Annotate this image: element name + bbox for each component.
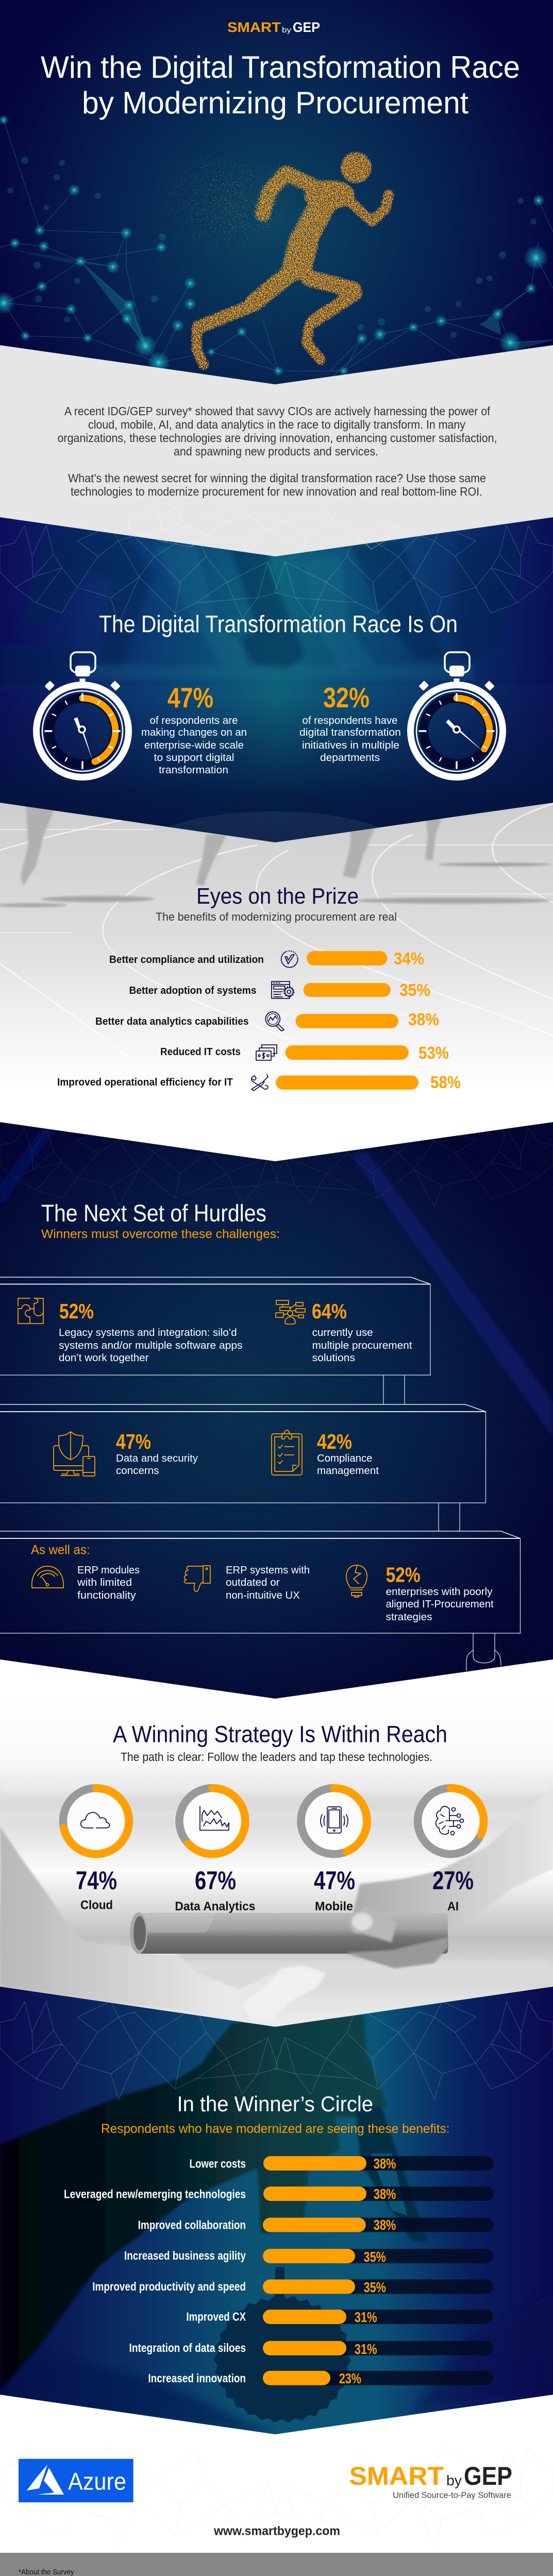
bar: CX xyxy=(186,2309,493,2325)
bar: innovation xyxy=(148,2370,493,2386)
page background: grey intro band xyxy=(0,309,553,567)
donut: mobile 47% xyxy=(301,1788,367,1913)
bar: efficiency xyxy=(57,1073,461,1092)
footer mesh xyxy=(0,2447,553,2545)
bar: IT costs: Reduced IT costs xyxy=(160,1046,241,1058)
website: www.smartbygep.com xyxy=(213,2524,340,2538)
panel: eyes on the prize xyxy=(57,884,461,1092)
Azure logo: Azure xyxy=(68,2468,126,2495)
bar: analytics: 38% xyxy=(408,1010,439,1029)
stat 47%: to support digital xyxy=(154,752,234,764)
panel: a winning strategy is within reach xyxy=(0,1699,553,2031)
donut: AI 27%: 27% xyxy=(432,1866,474,1895)
bar: compliance: 34% xyxy=(394,949,424,968)
heading: Eyes on the Prize xyxy=(196,884,359,909)
panel: hero xyxy=(0,0,553,384)
stat 32%: initiatives in multiple xyxy=(302,740,399,751)
bar: data siloes: Integration of data siloes xyxy=(129,2341,246,2354)
subheading: Winners must overcome these challenges: xyxy=(41,1227,280,1241)
logo: by xyxy=(282,26,292,35)
stat 47%: 47% xyxy=(167,682,213,714)
bar: collaboration: 38% xyxy=(374,2217,396,2233)
bar: data siloes: 31% xyxy=(355,2341,377,2357)
bar: IT costs: 53% xyxy=(418,1043,449,1062)
panel: intro text xyxy=(58,404,497,498)
particle runner xyxy=(124,116,389,365)
bar: efficiency: Improved operational efficiency for IT xyxy=(57,1077,233,1088)
bar: IT costs xyxy=(160,1043,449,1062)
donut: cloud 74%: 74% xyxy=(76,1866,117,1895)
hurdle 3: ERP modules: functionality xyxy=(77,1590,136,1601)
panel: intro text: and spawning new products and services. xyxy=(174,445,378,458)
bar: productivity: Improved productivity and speed xyxy=(92,2280,246,2293)
donut: mobile 47%: Mobile xyxy=(315,1900,353,1913)
bar: adoption: Better adoption of systems xyxy=(129,985,257,996)
hurdle 2: 47%: Data and security xyxy=(116,1453,198,1464)
heading: In the Winner’s Circle xyxy=(177,2092,373,2116)
heading: The Next Set of Hurdles xyxy=(41,1199,266,1226)
bar: efficiency: 58% xyxy=(430,1073,461,1092)
panel: footer xyxy=(0,2447,553,2576)
SMART by GEP logo xyxy=(349,2462,512,2500)
hurdle 3: ERP systems: ERP systems with xyxy=(226,1565,310,1576)
SMART by GEP logo: GEP xyxy=(464,2462,512,2490)
stat 47%: enterprise-wide scale xyxy=(144,740,244,751)
hurdle 3: ERP modules xyxy=(32,1565,140,1601)
heading: A Winning Strategy Is Within Reach xyxy=(113,1721,447,1748)
hurdle 1: 52%: 52% xyxy=(59,1299,94,1323)
panel: intro text: A recent IDG/GEP survey* showed that savvy CIOs are actively harnessing the power of xyxy=(64,404,491,418)
hurdle 3: ERP modules: ERP modules xyxy=(77,1565,140,1576)
bar: lower costs xyxy=(190,2156,494,2172)
hurdle 3: ERP systems xyxy=(185,1565,310,1601)
stat 32%: of respondents have xyxy=(302,715,398,726)
hurdle 1: 52%: don’t work together xyxy=(59,1352,149,1364)
stat 47% xyxy=(141,682,247,776)
hurdle 2: 47% xyxy=(54,1430,198,1477)
section heading: The Digital Transformation Race Is On xyxy=(99,611,458,637)
Azure logo xyxy=(19,2459,133,2502)
stat 47%: making changes on an xyxy=(141,727,247,738)
bar: compliance: Better compliance and utilization xyxy=(109,954,264,965)
hurdle 3: 52%: enterprises with poorly xyxy=(386,1586,493,1598)
stat 32% xyxy=(299,682,401,764)
bar: agility: 35% xyxy=(364,2249,386,2265)
hurdle 2: 42%: management xyxy=(317,1465,379,1477)
hurdle 2: 47%: concerns xyxy=(116,1465,159,1477)
bar: innovation: Increased innovation xyxy=(148,2371,246,2385)
hurdle 2: 42%: Compliance xyxy=(317,1453,372,1464)
SMART by GEP logo: by xyxy=(446,2472,462,2488)
bar: agility: Increased business agility xyxy=(124,2249,246,2262)
panel: intro text: cloud, mobile, AI, and data analytics in the race to digitally transform. In many xyxy=(88,418,465,431)
hurdle 1: 52% xyxy=(18,1298,242,1364)
donut: mobile 47%: 47% xyxy=(314,1866,355,1895)
stat 32%: 32% xyxy=(323,682,370,714)
donut: cloud 74%: Cloud xyxy=(80,1899,113,1912)
title xyxy=(41,50,520,120)
hurdle 3: 52%: 52% xyxy=(386,1563,421,1587)
mesh on grey band xyxy=(129,507,407,551)
bar: productivity xyxy=(92,2279,493,2295)
stat 32%: departments xyxy=(320,752,380,764)
stat 47%: transformation xyxy=(159,765,228,776)
bar: compliance xyxy=(109,949,424,968)
hurdle 3: ERP systems: outdated or xyxy=(226,1577,280,1588)
stopwatch 47% xyxy=(36,652,129,777)
donut: data analytics 67% xyxy=(175,1788,255,1913)
logo xyxy=(227,20,320,35)
bar: lower costs: Lower costs xyxy=(190,2157,246,2170)
bar: lower costs: 38% xyxy=(374,2156,396,2172)
bar: analytics xyxy=(95,1010,439,1031)
hero background xyxy=(0,0,553,384)
bar: analytics: Better data analytics capabilities xyxy=(95,1016,248,1027)
SMART by GEP logo: Unified Source-to-Pay Software xyxy=(393,2490,511,2500)
hurdle 3: as well as: As well as: xyxy=(31,1543,90,1557)
hurdle 2: 42% xyxy=(272,1430,379,1477)
logo: SMART xyxy=(227,20,281,35)
title: by Modernizing Procurement xyxy=(82,86,468,120)
bar: emerging technologies: 38% xyxy=(374,2186,396,2202)
hurdle 2: 42%: 42% xyxy=(317,1430,352,1453)
bar: emerging technologies: Leveraged new/emerging technologies xyxy=(64,2188,246,2201)
panel: the digital transformation race is on xyxy=(0,507,553,878)
title: Win the Digital Transformation Race xyxy=(41,50,520,84)
subheading: The path is clear: Follow the leaders and tap these technologies. xyxy=(121,1750,432,1764)
bar: CX: Improved CX xyxy=(186,2310,246,2324)
donut: AI 27%: AI xyxy=(447,1900,459,1913)
baton handoff photo xyxy=(0,1767,553,2027)
donut: data analytics 67%: 67% xyxy=(195,1866,236,1895)
hurdle 3: 52%: aligned IT-Procurement xyxy=(386,1599,494,1610)
bar: agility xyxy=(124,2249,493,2265)
medal silhouette xyxy=(213,2267,351,2422)
stat 47%: of respondents are xyxy=(149,715,238,726)
logo: GEP xyxy=(293,20,320,35)
SMART by GEP logo: SMART xyxy=(349,2462,444,2490)
panel: intro text: organizations, these technologies are driving innovation, enhancing customer satisfaction, xyxy=(58,431,497,445)
bar: data siloes xyxy=(129,2341,493,2357)
bar: collaboration: Improved collaboration xyxy=(138,2218,246,2232)
panel: intro text: technologies to modernize procurement for new innovation and real bottom-line ROI. xyxy=(71,485,482,498)
hurdle 1: 64%: currently use xyxy=(312,1327,373,1338)
hurdles background xyxy=(0,1118,553,1700)
race background photo xyxy=(0,517,553,842)
donut: AI 27% xyxy=(417,1788,484,1913)
panel: in the winner's circle xyxy=(0,1984,553,2437)
subheading: Respondents who have modernized are seeing these benefits: xyxy=(101,2122,449,2136)
subheading: The benefits of modernizing procurement are real xyxy=(156,910,397,923)
survey note xyxy=(0,2553,553,2576)
panel: intro text: What’s the newest secret for winning the digital transformation race? Use those same xyxy=(68,471,486,485)
hurdle 1: 52%: Legacy systems and integration: silo’d xyxy=(59,1327,237,1338)
hurdle frames xyxy=(0,1277,521,1671)
stat 32%: digital transformation xyxy=(299,727,401,738)
hurdle 3: 52% xyxy=(346,1563,494,1623)
panel: the next set of hurdles xyxy=(0,1118,553,1700)
hurdle 1: 64%: solutions xyxy=(312,1352,355,1364)
hurdle 1: 64% xyxy=(276,1299,412,1364)
bar: emerging technologies xyxy=(64,2186,494,2202)
hurdle 2: 47%: 47% xyxy=(116,1430,151,1453)
bar: productivity: 35% xyxy=(364,2279,386,2295)
donut: cloud 74% xyxy=(63,1788,129,1912)
network constellation xyxy=(0,115,553,379)
bar: adoption: 35% xyxy=(399,980,430,999)
hurdle 1: 64%: 64% xyxy=(312,1299,347,1323)
bar: innovation: 23% xyxy=(339,2370,361,2386)
hurdle 3: 52%: strategies xyxy=(386,1612,432,1623)
bar: collaboration xyxy=(138,2217,494,2233)
hurdle 1: 52%: systems and/or multiple software apps xyxy=(59,1340,242,1351)
hurdle 3: ERP modules: with limited xyxy=(77,1577,132,1588)
bar: CX: 31% xyxy=(355,2309,377,2325)
bar: adoption xyxy=(129,980,430,999)
hurdle 3: ERP systems: non-intuitive UX xyxy=(226,1590,300,1601)
stopwatch 32% xyxy=(410,652,503,777)
donut: data analytics 67%: Data Analytics xyxy=(175,1900,255,1913)
winner background photo xyxy=(0,1984,553,2437)
hurdle 1: 64%: multiple procurement xyxy=(312,1340,412,1351)
panel: track background with runners xyxy=(0,803,553,1049)
